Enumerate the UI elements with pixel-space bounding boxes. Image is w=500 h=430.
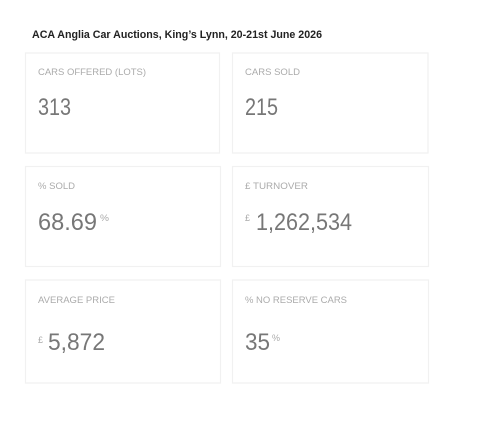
title: ACA Anglia Car Auctions, King’s Lynn, 20-21st June 2026 xyxy=(32,29,322,41)
panel: cars sold xyxy=(232,53,428,153)
panel: turnover: 1,262,534 xyxy=(256,209,352,236)
panel: turnover: £ TURNOVER xyxy=(245,181,309,191)
panel: average price: £ xyxy=(38,335,43,345)
panel: average price: AVERAGE PRICE xyxy=(38,295,115,305)
panel: percent sold xyxy=(26,166,220,266)
panel: no reserve cars: % xyxy=(272,333,280,343)
panel: percent sold: % SOLD xyxy=(38,181,76,191)
panel: no reserve cars xyxy=(232,280,428,383)
panel: no reserve cars: % NO RESERVE CARS xyxy=(245,295,347,305)
panel: percent sold: % xyxy=(100,213,109,223)
panel: cars offered: 313 xyxy=(38,94,71,121)
panel: percent sold: 68.69 xyxy=(38,209,97,236)
panel: average price: 5,872 xyxy=(48,329,105,356)
panel: turnover xyxy=(232,166,428,266)
panel: average price xyxy=(26,280,220,383)
panel: turnover: £ xyxy=(245,213,250,223)
panel: cars offered: CARS OFFERED (LOTS) xyxy=(38,67,146,77)
panel: cars offered xyxy=(26,53,220,153)
panel: cars sold: 215 xyxy=(245,94,278,121)
panel: cars sold: CARS SOLD xyxy=(245,67,301,77)
panel: no reserve cars: 35 xyxy=(245,329,270,356)
